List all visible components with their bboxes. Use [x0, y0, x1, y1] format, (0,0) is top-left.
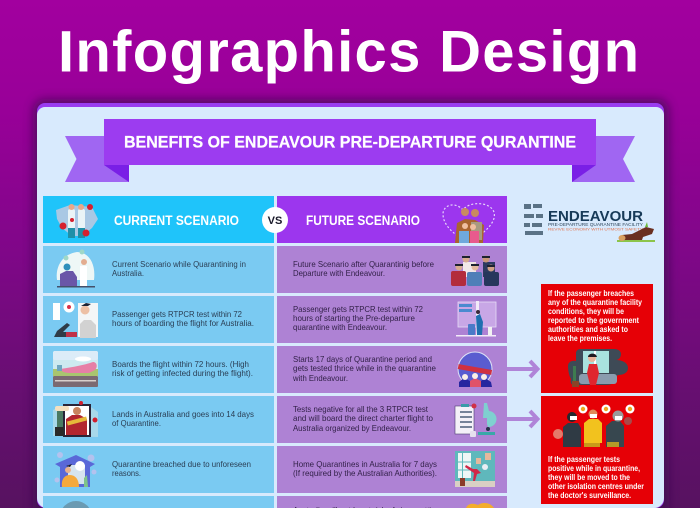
ribbon right fold [572, 165, 596, 182]
text: Starts 17 days of Quarantine period and [293, 354, 432, 364]
row 1 future [277, 246, 507, 293]
header: current scenario [43, 196, 274, 243]
text: Current Scenario while Quarantining in [112, 259, 246, 269]
text: Australia organized by Endeavour. [293, 423, 411, 433]
text [112, 259, 246, 278]
callout text: leave the premises. [548, 333, 612, 343]
text: and will board the direct charter flight to [293, 413, 433, 423]
text: Boards the flight within 72 hours. (High [112, 359, 249, 369]
text [112, 359, 253, 378]
row 5 current [43, 446, 274, 493]
text: Lands in Australia and goes into 14 days [112, 409, 254, 419]
icon: house quarantine breach [54, 452, 96, 487]
callout text: they will be moved to the [548, 472, 630, 482]
icon: log [617, 222, 655, 242]
row 1 current [43, 246, 274, 293]
ribbon banner [65, 119, 635, 182]
icon: globe [60, 501, 92, 508]
text: Passenger gets RTPCR test within 72 [112, 309, 242, 319]
callout: tests positive [541, 396, 653, 504]
icon: quarantine at window [53, 401, 98, 437]
text [293, 259, 434, 278]
callout text: positive while in quarantine, [548, 463, 640, 473]
text: reasons. [112, 468, 141, 478]
icon: traveler at airport [456, 301, 496, 336]
text: risk of getting infected during the flight). [112, 368, 253, 378]
icon: masked group [451, 256, 499, 286]
icon: vaccination [57, 250, 95, 288]
icon: airplane at airport [53, 351, 98, 387]
illustration: woman in room [568, 349, 628, 387]
row 2 current [43, 296, 274, 343]
text: hours of boarding the flight for Australia. [112, 318, 254, 328]
row 3 future [277, 346, 507, 393]
callout text: any of the quarantine facility [548, 297, 642, 307]
ribbon heading: BENEFITS OF ENDEAVOUR PRE-DEPARTURE QURANTINE [124, 132, 576, 152]
text: with Endeavour. [292, 373, 348, 383]
text: Australia. [112, 268, 144, 278]
VS badge [262, 207, 288, 233]
ribbon left fold [104, 165, 129, 182]
callout text: If the passenger breaches [548, 288, 634, 298]
text [293, 304, 423, 332]
logo wordmark: ENDEAVOUR [548, 209, 644, 225]
text: Home Quarantines in Australia for 7 days [293, 459, 437, 469]
title: Infographics Design [58, 20, 639, 84]
text [112, 459, 251, 478]
logo subtitle: PRE-DEPARTURE QUARANTINE FACILITY [548, 222, 644, 228]
arrow: to positive-test outcome [507, 411, 538, 427]
text: Tests negative for all the 3 RTPCR test [293, 404, 429, 414]
icon: home exercise scene [455, 451, 495, 487]
illustration: three masked people [553, 404, 634, 447]
icon: clipboard and microscope [455, 403, 497, 437]
text: (If required by the Australian Authorities). [293, 468, 437, 478]
text [112, 409, 254, 428]
callout: breach of conditions [541, 284, 653, 393]
panel shadow [33, 99, 669, 508]
text: Future Scenario after Quarantinig before [293, 259, 434, 269]
heading: CURRENT SCENARIO [114, 213, 239, 228]
callout text: authorities and asked to [548, 324, 628, 334]
logo: Endeavour [524, 204, 655, 242]
icon: sun [466, 503, 494, 508]
text [112, 309, 254, 328]
logo emblem [524, 204, 543, 235]
callout text: reported to the government [548, 315, 639, 325]
ribbon right tail [572, 136, 635, 182]
row 3 current [43, 346, 274, 393]
icon: RTPCR lab [53, 302, 98, 338]
ribbon body [104, 119, 596, 165]
arrow: to breach outcome [507, 361, 538, 377]
callout text [548, 454, 645, 500]
row 6 future [277, 496, 507, 508]
row 6 current [43, 496, 274, 508]
text: Passenger gets RTPCR test within 72 [293, 304, 423, 314]
icon: doctors and viruses [56, 204, 98, 238]
row 2 future [277, 296, 507, 343]
row 5 future [277, 446, 507, 493]
VS badge: VS [268, 215, 282, 227]
text: of Quarantine. [112, 418, 161, 428]
row 4 future [277, 396, 507, 443]
text: gets tested thrice while in the quarantine [293, 363, 436, 373]
callout text [548, 288, 642, 343]
heading: FUTURE SCENARIO [306, 213, 420, 228]
text [293, 404, 433, 433]
icon: quarantine circle with people [458, 352, 492, 387]
callout text: conditions, they will be [548, 306, 624, 316]
text [292, 354, 436, 383]
text: quarantine with Endeavour. [293, 322, 387, 332]
ribbon left tail [65, 136, 129, 182]
text: Quarantine breached due to unforeseen [112, 459, 251, 469]
text: Departure with Endeavour. [293, 268, 385, 278]
icon: family in dotted heart [443, 204, 494, 243]
text: hours of starting the Pre-departure [293, 313, 415, 323]
callout text: the doctor's surveillance. [548, 490, 631, 500]
callout text: If the passenger tests [548, 454, 620, 464]
header: future scenario [277, 196, 507, 243]
panel [37, 103, 664, 508]
logo tagline: REVIVE ECONOMY WITH UTMOST SAFETY [548, 228, 644, 232]
callout text: other isolation centres under [548, 481, 645, 491]
text [293, 459, 437, 478]
row 4 current [43, 396, 274, 443]
